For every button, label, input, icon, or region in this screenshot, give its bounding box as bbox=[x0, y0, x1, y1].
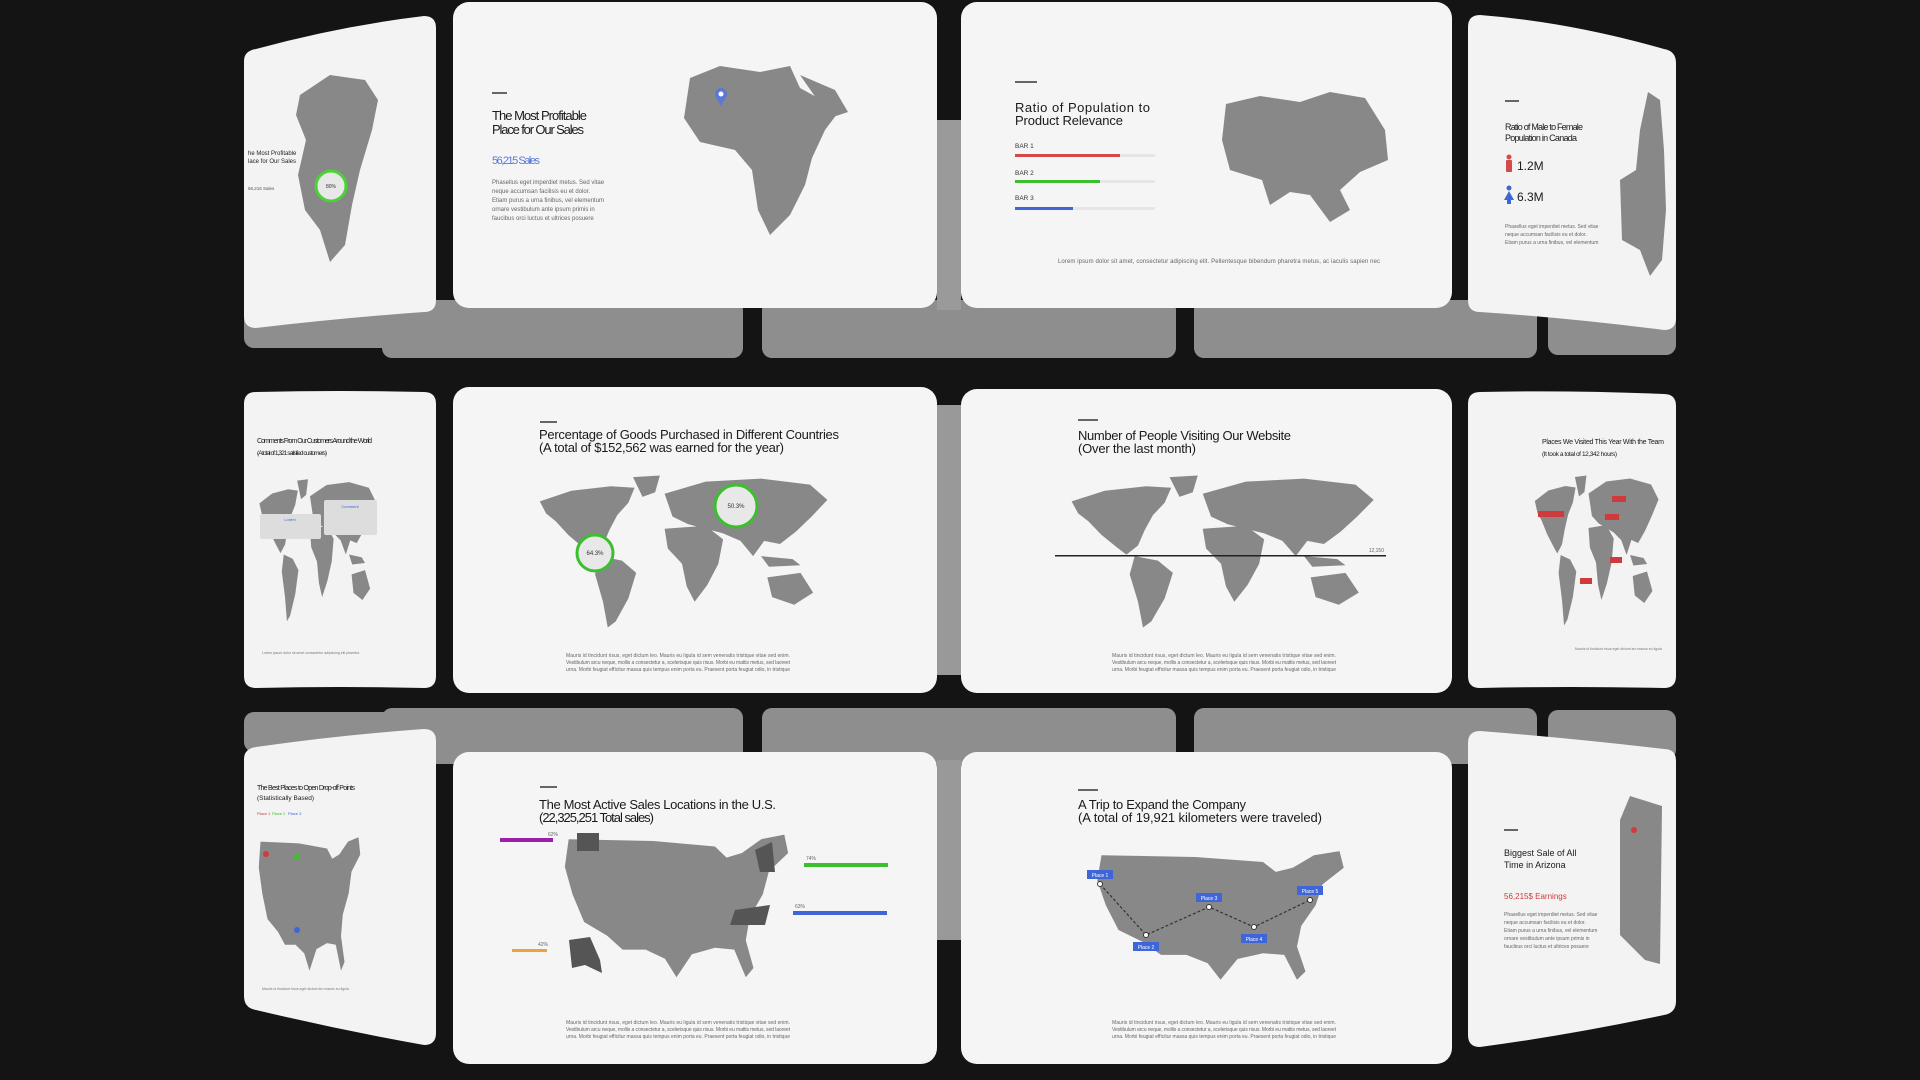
panel: people visiting website: (Over the last month) bbox=[1078, 441, 1196, 456]
title: Number of People Visiting Our Website bbox=[1078, 428, 1291, 443]
donut: 64.3%: 64.3% bbox=[586, 551, 604, 557]
panel: biggest sale arizona: ornare vestibulum ante ipsum primis in bbox=[1504, 936, 1590, 942]
route: Place 4 bbox=[1246, 937, 1263, 943]
panel: ratio male female canada: 6.3M bbox=[1517, 190, 1544, 204]
callout lines: 74% bbox=[806, 856, 817, 862]
map: asia blob bbox=[296, 75, 378, 262]
map: world bbox=[259, 479, 376, 621]
route: Place 3 bbox=[1201, 896, 1218, 902]
panel: ratio of population bbox=[961, 2, 1452, 308]
icon: male red bbox=[1506, 154, 1512, 172]
panel: ratio male female canada: neque accumsan facilisis eu et dolor. bbox=[1505, 232, 1587, 238]
bar chart bbox=[1015, 143, 1155, 210]
panel: places visited: Mauris id tincidunt risus eget dictum leo mauris eu ligula bbox=[1575, 647, 1662, 651]
title: Percentage of Goods Purchased in Different Countries bbox=[539, 427, 840, 442]
map: arizona bbox=[1620, 796, 1662, 964]
title: The Most Profitable bbox=[492, 108, 587, 123]
bar chart: BAR 2 bbox=[1015, 170, 1034, 177]
map: usa bbox=[259, 837, 360, 971]
map: usa bbox=[1097, 851, 1344, 980]
footer text bbox=[566, 653, 791, 673]
body text: Etiam purus a urna finibus, vel elementum bbox=[492, 198, 604, 204]
panel: africa most profitable far left: 56,215 Sales bbox=[248, 186, 275, 191]
legend: Place 2 bbox=[272, 811, 286, 816]
map: ukraine bbox=[1222, 92, 1388, 222]
donut: percentage: 80% bbox=[326, 184, 337, 190]
panel: percentage of goods bbox=[453, 387, 937, 693]
panel: trip to expand bbox=[961, 752, 1452, 1064]
panel: biggest sale arizona: Time in Arizona bbox=[1504, 860, 1566, 870]
bar chart: BAR 3 bbox=[1015, 195, 1034, 202]
panel: most active sales locations bbox=[453, 752, 937, 1064]
icon: female blue bbox=[1504, 186, 1514, 204]
callout lines bbox=[500, 832, 888, 952]
panel: biggest sale arizona: neque accumsan facilisis eu et dolor. bbox=[1504, 920, 1586, 926]
panel: drop-off points: (Statistically Based) bbox=[257, 795, 314, 802]
labels bbox=[1538, 496, 1626, 584]
panel: trip to expand: (A total of 19,921 kilometers were traveled) bbox=[1078, 810, 1322, 825]
route: Place 5 bbox=[1302, 889, 1319, 895]
title: The Most Active Sales Locations in the U.S. bbox=[539, 797, 776, 812]
panel: people visiting website bbox=[961, 389, 1452, 693]
panel: comments from customers bbox=[244, 391, 436, 688]
panel: trip to expand: Mauris id tincidunt risus, eget dictum leo. Mauris eu ligula id sem venenatis tristique vitae sed enim. bbox=[1112, 1020, 1336, 1026]
panel: places visited: Places We Visited This Year With the Team bbox=[1542, 439, 1664, 446]
footer text: Mauris id tincidunt risus, eget dictum leo. Mauris eu ligula id sem venenatis tristique vitae sed enim. bbox=[566, 653, 790, 659]
icon: pin bbox=[1631, 827, 1637, 833]
callout lines: 63% bbox=[795, 904, 806, 910]
panel: drop-off points: The Best Places to Open Drop-off Points bbox=[257, 785, 356, 792]
route bbox=[1087, 870, 1323, 951]
map: canada bbox=[1620, 92, 1666, 276]
panel: most profitable place bbox=[453, 2, 937, 308]
panel: biggest sale arizona: 56,215$ Earnings bbox=[1504, 892, 1567, 901]
panel: comments from customers: Lorem ipsum dolor sit amet consectetur adipiscing elit pharetra bbox=[262, 651, 359, 655]
map: africa bbox=[684, 66, 840, 235]
icon: pin bbox=[715, 88, 727, 106]
line marker: 12,150 bbox=[1369, 548, 1384, 554]
panel: places visited bbox=[1468, 391, 1676, 688]
panel: ratio male female canada: Ratio of Male to Female bbox=[1505, 122, 1583, 132]
footer text: urna. Morbi feugiat efficitur massa quis tempus enim porta eu. Praesent porta feugiat odio, in tristique bbox=[566, 667, 790, 673]
panel: ratio male female canada: Phasellus eget imperdiet metus. Sed vitae bbox=[1505, 224, 1599, 230]
callout lines: 62% bbox=[548, 832, 559, 838]
body text: Phasellus eget imperdiet metus. Sed vitae bbox=[492, 180, 605, 186]
panel: drop-off points bbox=[244, 729, 436, 1045]
panel: people visiting website: urna. Morbi feugiat efficitur massa quis tempus enim porta eu. Praesent porta feugiat odio, in tristique bbox=[1112, 667, 1336, 673]
panel: africa most profitable far left: he Most Profitable bbox=[248, 151, 297, 157]
map: world bbox=[1535, 476, 1659, 626]
panel: biggest sale arizona bbox=[1468, 731, 1676, 1047]
donut: 64.3% bbox=[577, 535, 613, 571]
body text: ornare vestibulum ante ipsum primis in bbox=[492, 207, 595, 213]
legend: Place 1 bbox=[257, 811, 271, 816]
panel: africa most profitable far left bbox=[244, 16, 436, 328]
panel: most active sales locations: Mauris id tincidunt risus, eget dictum leo. Mauris eu ligula id sem venenatis tristique vitae sed enim. bbox=[566, 1020, 790, 1026]
panel: ratio of population: Product Relevance bbox=[1015, 113, 1123, 128]
panel: comments from customers: (A total of 1,321 satisfied customers) bbox=[257, 450, 327, 457]
panel: ratio male female canada: Etiam purus a urna finibus, vel elementum bbox=[1505, 240, 1598, 246]
callouts bbox=[260, 500, 377, 539]
footer text: Vestibulum arcu neque, mollis a consectetur a, scelerisque quis risus. Morbi eu mattis metus, sed laoreet bbox=[566, 660, 791, 666]
donut: 50.3% bbox=[715, 485, 757, 527]
background back panels bbox=[244, 120, 1676, 940]
panel: biggest sale arizona: Biggest Sale of All bbox=[1504, 848, 1577, 858]
panel: places visited: (It took a total of 12,342 hours) bbox=[1542, 451, 1617, 458]
panel: ratio male female canada: Population in Canada bbox=[1505, 133, 1577, 143]
map: world bbox=[540, 476, 827, 628]
panel: most profitable place: Place for Our Sales bbox=[492, 122, 584, 137]
panel: trip to expand: Vestibulum arcu neque, mollis a consectetur a, scelerisque quis risus. Morbi eu mattis metus, sed laoreet bbox=[1112, 1027, 1337, 1033]
panel: most active sales locations: urna. Morbi feugiat efficitur massa quis tempus enim porta eu. Praesent porta feugiat odio, in tristique bbox=[566, 1034, 790, 1040]
panel: most active sales locations: (22,325,251 Total sales) bbox=[539, 810, 654, 825]
callouts: Comment bbox=[341, 504, 360, 509]
route: Place 1 bbox=[1092, 873, 1109, 879]
panel: most active sales locations: Vestibulum arcu neque, mollis a consectetur a, scelerisque quis risus. Morbi eu mattis metus, sed laoreet bbox=[566, 1027, 791, 1033]
panel: ratio male female canada bbox=[1468, 15, 1676, 330]
legend: Place 3 bbox=[288, 811, 302, 816]
donut: 50.3%: 50.3% bbox=[727, 504, 745, 510]
body text: faucibus orci luctus et ultrices posuere bbox=[492, 216, 594, 222]
map: usa bbox=[565, 835, 788, 977]
legend bbox=[257, 811, 302, 816]
donut: percentage bbox=[316, 171, 346, 201]
panel: drop-off points: Mauris id tincidunt risus eget dictum leo mauris eu ligula bbox=[262, 987, 349, 991]
panel: people visiting website: Mauris id tincidunt risus, eget dictum leo. Mauris eu ligula id sem venenatis tristique vitae sed enim. bbox=[1112, 653, 1336, 659]
callout lines: 42% bbox=[538, 942, 549, 948]
route: Place 2 bbox=[1138, 945, 1155, 951]
callouts: Lorem bbox=[284, 517, 296, 522]
panel: trip to expand: urna. Morbi feugiat efficitur massa quis tempus enim porta eu. Praesent porta feugiat odio, in tristique bbox=[1112, 1034, 1336, 1040]
panel: people visiting website: Vestibulum arcu neque, mollis a consectetur a, scelerisque quis risus. Morbi eu mattis metus, sed laoreet bbox=[1112, 660, 1337, 666]
body text bbox=[492, 180, 605, 222]
panel: biggest sale arizona: Phasellus eget imperdiet metus. Sed vitae bbox=[1504, 912, 1598, 918]
map: world with navy fill bbox=[1072, 476, 1374, 628]
stat: 56,215 Sales bbox=[492, 155, 540, 167]
title: Ratio of Population to bbox=[1015, 100, 1150, 115]
panel: biggest sale arizona: Etiam purus a urna finibus, vel elementum bbox=[1504, 928, 1597, 934]
panel: comments from customers: Comments From Our Customers Around the World bbox=[257, 438, 372, 445]
panel: africa most profitable far left: lace for Our Sales bbox=[248, 159, 296, 165]
panel: ratio male female canada: 1.2M bbox=[1517, 159, 1544, 173]
panel: biggest sale arizona: faucibus orci luctus et ultrices posuere bbox=[1504, 944, 1589, 950]
pins bbox=[263, 851, 300, 933]
footer text: Lorem ipsum dolor sit amet, consectetur adipiscing elit. Pellentesque bibendum pharetra metus, ac iaculis sapien nec bbox=[1058, 259, 1380, 265]
body text: neque accumsan facilisis eu et dolor. bbox=[492, 189, 590, 195]
title: A Trip to Expand the Company bbox=[1078, 797, 1246, 812]
panel: percentage of goods: (A total of $152,562 was earned for the year) bbox=[539, 440, 784, 455]
bar chart: BAR 1 bbox=[1015, 143, 1034, 150]
